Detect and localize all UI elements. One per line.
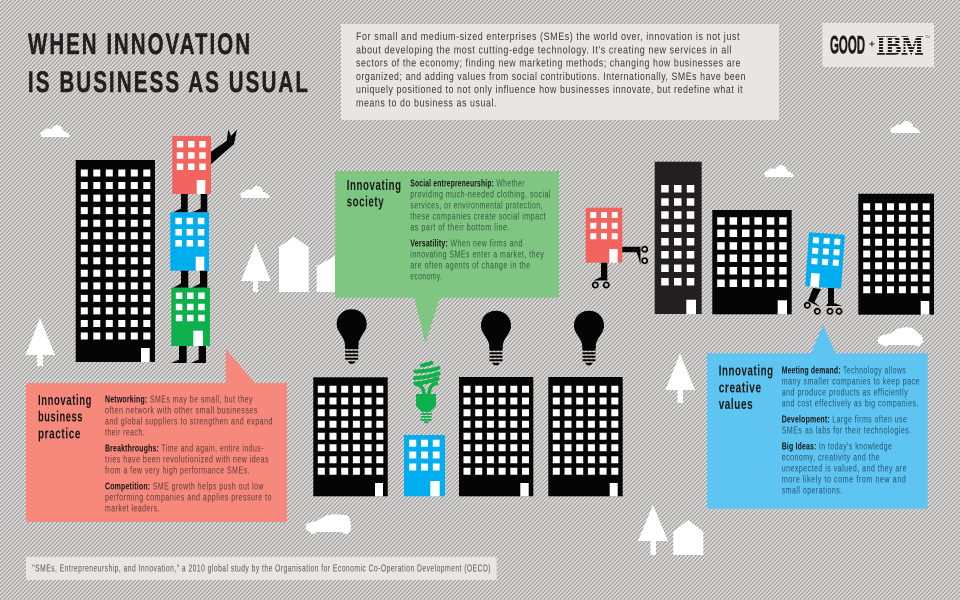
building: dark tall right	[655, 162, 702, 314]
panel: innovating business practice	[26, 349, 287, 522]
heading: business practice: practice	[38, 426, 81, 442]
building: centre black 2	[459, 377, 533, 496]
cloud: centre	[240, 186, 270, 198]
footer: source citation: "SMEs, Entrepreneurship, and Innovation," a 2010 global study by the Organisation for Economic Co-Operation Development (OECD)	[32, 564, 491, 574]
building: centre black 3	[548, 377, 623, 496]
text: society: economy.	[410, 272, 442, 283]
panel: introduction: uniquely positioned to not only influence how businesses innovate, but redefine what it	[356, 84, 743, 96]
logo: GOOD + IBM: GOOD	[830, 32, 865, 60]
text: business practice: tries have been revolutionized with new ideas	[105, 454, 269, 465]
tree: right	[666, 354, 695, 403]
footer: source citation	[26, 557, 497, 580]
text: business practice: Networking: SMEs may be small, but they	[105, 394, 253, 405]
tree: far left	[26, 318, 55, 366]
text: business practice: performing companies and applies pressure to	[105, 492, 272, 503]
building: small blue	[404, 435, 445, 496]
heading: creative values: values	[719, 397, 753, 413]
panel: introduction: about developing the most cutting-edge technology. It's creating new services in all	[356, 44, 732, 56]
text: business practice: Breakthroughs: Time and again, entire indus-	[105, 443, 264, 454]
text: creative values: economy, creativity and the	[782, 453, 880, 464]
panel: introduction	[341, 24, 779, 120]
text: creative values: Development: Large firms often use	[782, 415, 907, 426]
text: creative values: Big Ideas: In today's knowledge	[782, 442, 892, 453]
text: society	[410, 179, 551, 283]
text: business practice: and global suppliers to strengthen and expand	[105, 416, 273, 427]
text: society: Versatility: When new firms and	[410, 239, 523, 250]
character: stacked green building	[171, 288, 210, 363]
text: business practice	[105, 394, 273, 514]
title	[28, 28, 310, 99]
house: small behind panel	[317, 256, 335, 292]
tree: bottom right	[638, 505, 668, 555]
text: business practice: market leaders.	[105, 503, 160, 514]
logo: GOOD + IBM: +	[869, 40, 875, 50]
heading: creative values: Innovating	[719, 364, 774, 380]
building: tall black left	[76, 160, 155, 362]
text: society: innovating SMEs enter a market, they	[410, 250, 544, 261]
panel: introduction: means to do business as usual.	[356, 98, 497, 110]
text: society: providing much-needed clothing, social	[410, 190, 551, 201]
panel: innovating society	[335, 171, 559, 343]
panel: introduction: organized; and adding values from social contributions. Internationally, SMEs have been	[356, 71, 746, 83]
title: IS BUSINESS AS USUAL	[28, 66, 310, 99]
building: centre black 1	[313, 377, 388, 496]
logo: GOOD + IBM: TM	[925, 35, 930, 39]
text: society: are often agents of change in the	[410, 261, 531, 272]
house: tall	[279, 237, 309, 292]
text: creative values: Meeting demand: Technology allows	[782, 366, 906, 377]
heading: business practice: Innovating	[38, 393, 92, 409]
cloud: top left	[40, 125, 70, 137]
cloud: right	[764, 165, 794, 177]
heading: society: society	[347, 195, 384, 211]
text: society: these companies create social impact	[410, 212, 546, 223]
cloud: top right	[890, 121, 920, 133]
heading: society	[347, 178, 402, 211]
car: bottom	[306, 514, 351, 534]
text: society: services, or environmental protection,	[410, 201, 543, 212]
icon: black light bulb 2	[481, 311, 511, 365]
text: business practice: their reach.	[105, 427, 145, 438]
icon: green compact fluorescent bulb	[415, 363, 438, 423]
heading: creative values: creative	[719, 380, 762, 396]
character: stacked blue building	[170, 212, 209, 288]
heading: creative values	[719, 364, 774, 413]
logo: GOOD + IBM: IBM	[876, 30, 924, 60]
title: WHEN INNOVATION	[28, 28, 252, 61]
icon: black light bulb 3	[574, 311, 604, 365]
character: stacked red building with raised arm	[172, 129, 237, 212]
building: black middle right	[712, 210, 792, 314]
text: business practice: often network with other small businesses	[105, 405, 258, 416]
text: business practice: from a few very high performance SMEs.	[105, 465, 250, 476]
panel: introduction: sectors of the economy; finding new marketing methods; changing how businesses are	[356, 58, 741, 70]
text: creative values: and produce products as efficiently	[782, 388, 908, 399]
icon: black light bulb 1	[337, 309, 367, 364]
heading: society: Innovating	[347, 178, 402, 194]
text: creative values: small operations.	[782, 486, 843, 497]
heading: business practice: business	[38, 410, 83, 426]
text: creative values	[782, 366, 920, 497]
house: bottom right	[673, 520, 703, 555]
character: blue building on roller skates	[805, 232, 845, 314]
panel: introduction: For small and medium-sized enterprises (SMEs) the world over, innovation is not just	[356, 31, 740, 43]
text: creative values: unexpected is valued, and they are	[782, 464, 907, 475]
panel: innovating creative values	[707, 325, 928, 509]
logo: GOOD + IBM	[822, 23, 934, 67]
text: business practice: Competition: SME growth helps push out low	[105, 481, 264, 492]
character: red building on roller skates	[586, 208, 647, 288]
text: society: as part of their bottom line.	[410, 223, 510, 234]
tree: centre left	[241, 243, 271, 292]
car: right	[878, 327, 923, 346]
text: creative values: more likely to come from new and	[782, 475, 906, 486]
heading: business practice	[38, 393, 92, 442]
text: society: Social entrepreneurship: Whether	[410, 179, 525, 190]
building: black far right	[858, 194, 934, 315]
